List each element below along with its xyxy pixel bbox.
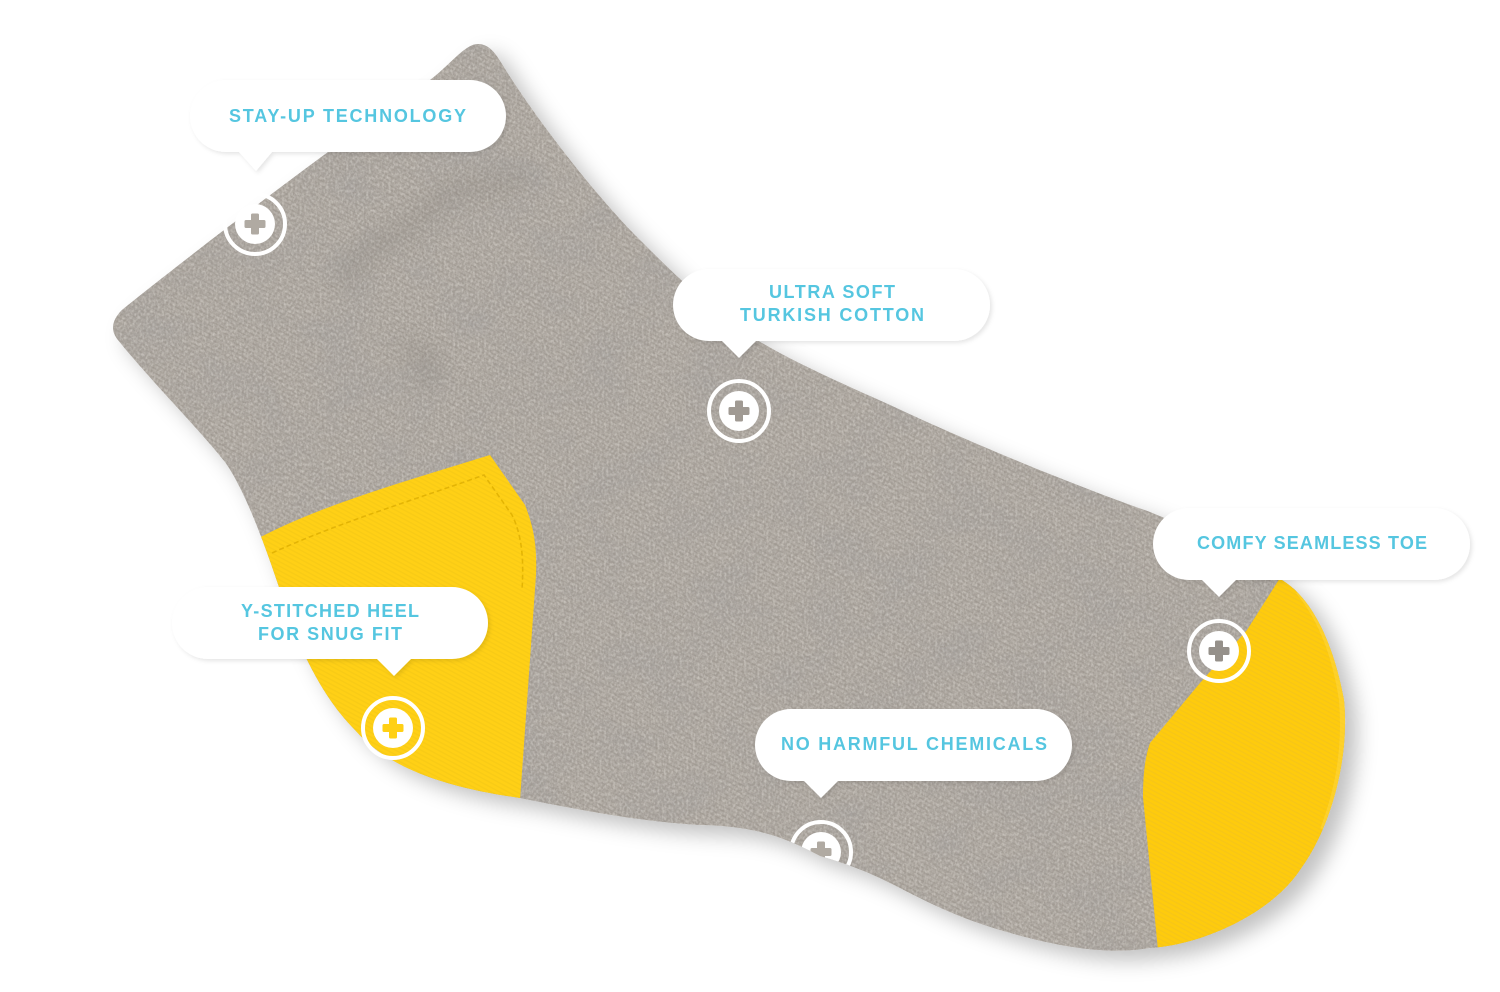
cuff mottling — [345, 175, 525, 385]
callout: stay-up technology — [190, 80, 506, 171]
callout: y-stitched heel for snug fit: FOR SNUG FIT — [258, 624, 402, 644]
callout: y-stitched heel for snug fit — [172, 587, 488, 676]
callout: ultra soft turkish cotton: TURKISH COTTON — [740, 305, 924, 325]
callout: ultra soft turkish cotton — [673, 269, 990, 358]
callout: comfy seamless toe — [1153, 508, 1470, 597]
grey sock body — [100, 30, 1360, 970]
callout: ultra soft turkish cotton: ULTRA SOFT — [769, 282, 895, 302]
yellow toe — [1143, 580, 1346, 948]
hotspot: ultra soft cotton — [709, 381, 769, 441]
hotspot: y-stitched heel — [363, 698, 423, 758]
yellow heel — [240, 455, 536, 800]
fabric knit texture — [100, 30, 1360, 970]
hotspot: seamless toe — [1189, 621, 1249, 681]
callout: no harmful chemicals — [755, 709, 1072, 798]
callout: y-stitched heel for snug fit: Y-STITCHED HEEL — [241, 601, 419, 621]
sock photo — [100, 30, 1360, 970]
callout: stay-up technology: STAY-UP TECHNOLOGY — [229, 106, 466, 126]
callout: comfy seamless toe: COMFY SEAMLESS TOE — [1197, 533, 1427, 553]
hotspot: stay-up technology — [225, 194, 285, 254]
callout: no harmful chemicals: NO HARMFUL CHEMICALS — [781, 734, 1047, 754]
hotspot: no harmful chemicals — [790, 820, 853, 866]
